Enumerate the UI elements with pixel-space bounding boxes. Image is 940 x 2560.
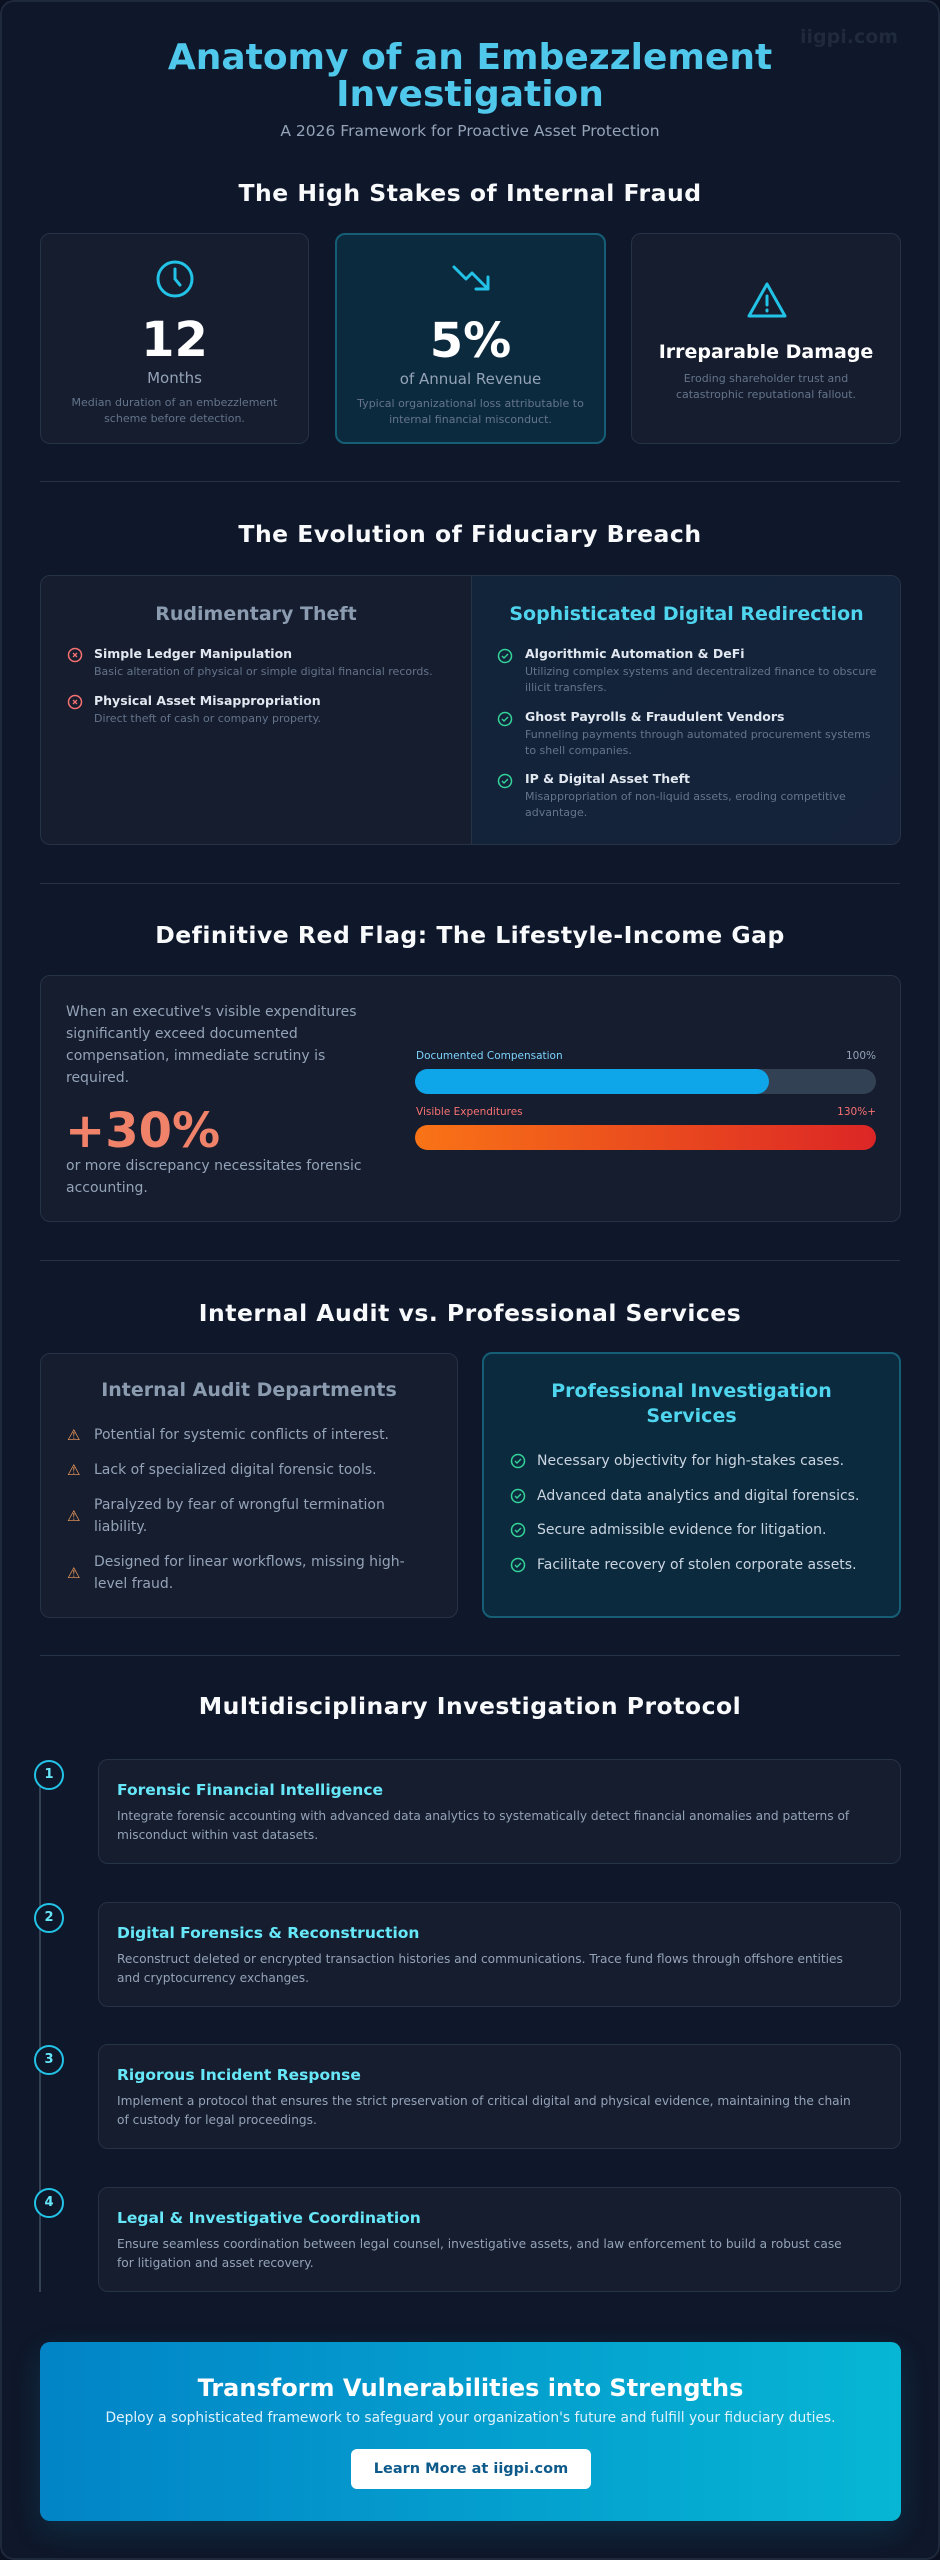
stat card: damage: Eroding shareholder trust and — [684, 372, 848, 385]
bar chart: 130%+ — [837, 1106, 876, 1118]
step 3: 3 — [44, 2052, 54, 2067]
panel: internal audit: Designed for linear workflows, missing high-level fraud. — [94, 1554, 405, 1592]
icon: clock — [156, 260, 194, 298]
stat card: 5%: 5% — [430, 313, 511, 369]
title — [168, 37, 772, 115]
panel: evolution comparison: to shell companies. — [525, 744, 632, 757]
step 4: 4 — [44, 2195, 54, 2210]
title: Investigation — [336, 74, 604, 115]
step 3: of custody for legal proceedings. — [117, 2113, 317, 2127]
panel: professional services: Professional Investigation — [551, 1380, 832, 1402]
stat card: 5%: Typical organizational loss attributable to — [357, 397, 584, 410]
right item 1 — [498, 646, 876, 694]
stat card: 12 months — [40, 233, 309, 444]
CTA banner — [40, 2342, 901, 2521]
CTA banner: Transform Vulnerabilities into Strengths — [198, 2374, 743, 2402]
step 3: Rigorous Incident Response — [117, 2066, 361, 2084]
audit item list: ⚠ — [67, 1426, 80, 1444]
stat card: damage — [631, 233, 901, 444]
stat card: 5% — [335, 233, 606, 444]
step 4: for litigation and asset recovery. — [117, 2256, 314, 2270]
panel: evolution comparison: illicit transfers. — [525, 681, 607, 694]
text block: When an executive's visible expenditures significantly exceed documented compensation, immediate scrutiny is required. — [66, 1004, 357, 1086]
panel: evolution comparison: Ghost Payrolls & Fraudulent Vendors — [525, 709, 784, 724]
panel: evolution comparison: Physical Asset Misappropriation — [94, 693, 321, 708]
stat card: 12 months: 12 — [141, 312, 208, 368]
panel: evolution comparison: Misappropriation of non-liquid assets, eroding competitive — [525, 790, 846, 803]
heading: protocol: Multidisciplinary Investigation Protocol — [199, 1692, 741, 1720]
step 2: Digital Forensics & Reconstruction — [117, 1924, 419, 1942]
watermark: iigpi.com — [800, 26, 898, 48]
icon: warning — [747, 282, 786, 318]
panel: lifestyle gap — [40, 975, 901, 1222]
panel: evolution comparison: Direct theft of cash or company property. — [94, 712, 321, 725]
heading: audit vs professional: Internal Audit vs. Professional Services — [199, 1299, 741, 1327]
right half background — [471, 576, 902, 846]
timeline line — [39, 1775, 41, 2292]
step 3: Implement a protocol that ensures the strict preservation of critical digital and physical evidence, maintaining the chain — [117, 2094, 851, 2108]
right item 2 — [498, 709, 871, 757]
step 1: misconduct within vast datasets. — [117, 1828, 318, 1842]
bar chart: 100% — [846, 1050, 876, 1062]
panel: internal audit: Paralyzed by fear of wrongful termination liability. — [94, 1497, 385, 1535]
stat card: 5%: internal financial misconduct. — [389, 413, 552, 426]
panel: internal audit: Internal Audit Departments — [101, 1379, 397, 1401]
audit item list: Potential for systemic conflicts of interest. — [94, 1427, 389, 1443]
stat card: 12 months: Median duration of an embezzlement — [72, 396, 277, 409]
panel: professional services: Facilitate recovery of stolen corporate assets. — [537, 1556, 857, 1572]
step 2: and cryptocurrency exchanges. — [117, 1971, 309, 1985]
panel: evolution comparison: Funneling payments through automated procurement systems — [525, 728, 871, 741]
panel: evolution comparison: IP & Digital Asset Theft — [525, 771, 690, 786]
panel: evolution comparison — [40, 575, 901, 845]
heading: evolution: The Evolution of Fiduciary Breach — [238, 520, 702, 548]
icon: trend down — [452, 265, 490, 291]
step 1: Integrate forensic accounting with advanced data analytics to systematically detect financial anomalies and patterns of — [117, 1809, 849, 1823]
panel: evolution comparison: Simple Ledger Manipulation — [94, 646, 292, 661]
panel: internal audit: ⚠ — [67, 1461, 80, 1479]
panel: professional services: Services — [646, 1405, 737, 1427]
stat card: 12 months: scheme before detection. — [104, 412, 245, 425]
heading: red flag: Definitive Red Flag: The Lifestyle-Income Gap — [155, 921, 785, 949]
step 1: 1 — [44, 1767, 54, 1782]
panel: evolution comparison: Basic alteration of physical or simple digital financial records. — [94, 665, 433, 678]
right item 3 — [498, 771, 846, 819]
panel: internal audit — [40, 1353, 458, 1618]
CTA button — [351, 2449, 591, 2489]
panel: professional services — [482, 1352, 901, 1618]
panel: evolution comparison: advantage. — [525, 806, 587, 819]
panel: internal audit: Lack of specialized digital forensic tools. — [94, 1462, 377, 1478]
professional item list: Necessary objectivity for high-stakes cases. — [537, 1453, 844, 1469]
subtitle: A 2026 Framework for Proactive Asset Protection — [280, 122, 660, 140]
left heading: Rudimentary Theft — [155, 603, 357, 625]
step 3 — [34, 2044, 901, 2149]
title: Anatomy of an Embezzlement — [168, 37, 772, 78]
panel: lifestyle gap: or more discrepancy necessitates forensic accounting. — [66, 1158, 362, 1196]
stat card: 5%: of Annual Revenue — [400, 370, 541, 388]
step 4: Ensure seamless coordination between legal counsel, investigative assets, and law enforcement to build a robust case — [117, 2237, 842, 2251]
stat card: damage: Irreparable Damage — [659, 341, 873, 363]
left item 1 — [68, 646, 433, 678]
panel: internal audit: ⚠ — [67, 1507, 80, 1525]
step 2: Reconstruct deleted or encrypted transaction histories and communications. Trace fund flows through offshore entities — [117, 1952, 843, 1966]
bar chart — [415, 1050, 876, 1150]
step 4: Legal & Investigative Coordination — [117, 2209, 421, 2227]
big stat: +30% — [65, 1103, 220, 1159]
CTA banner: Deploy a sophisticated framework to safeguard your organization's future and fulfill your fiduciary duties. — [105, 2410, 836, 2426]
bar chart: Documented Compensation — [416, 1050, 563, 1062]
step 2 — [34, 1902, 901, 2007]
heading: high stakes: The High Stakes of Internal Fraud — [238, 179, 702, 207]
bar chart: Visible Expenditures — [416, 1106, 523, 1118]
step 1 — [34, 1759, 901, 1864]
step 1: Forensic Financial Intelligence — [117, 1781, 383, 1799]
step 2: 2 — [44, 1910, 54, 1925]
left item 2 — [68, 693, 321, 725]
panel: professional services: Advanced data analytics and digital forensics. — [537, 1488, 859, 1504]
stat card: 12 months: Months — [147, 369, 202, 387]
panel: evolution comparison: Utilizing complex systems and decentralized finance to obscure — [525, 665, 876, 678]
panel: professional services: Secure admissible evidence for litigation. — [537, 1522, 826, 1538]
panel: evolution comparison: Algorithmic Automation & DeFi — [525, 646, 745, 661]
stat card: damage: catastrophic reputational fallout. — [676, 388, 856, 401]
CTA button: Learn More at iigpi.com — [374, 2461, 568, 2477]
right heading: Sophisticated Digital Redirection — [509, 603, 864, 625]
step 4 — [34, 2187, 901, 2292]
panel: internal audit: ⚠ — [67, 1564, 80, 1582]
